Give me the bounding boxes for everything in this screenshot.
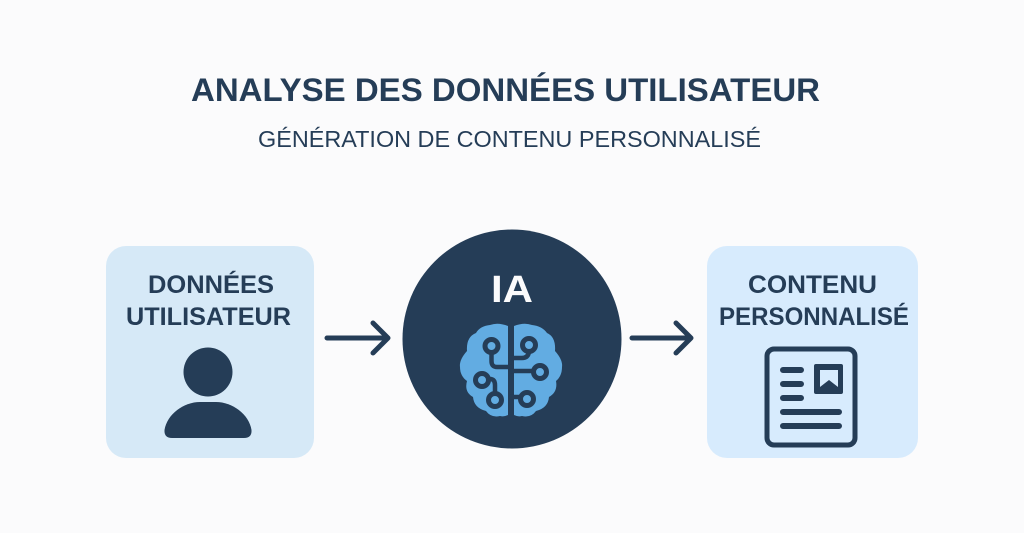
panel heading: user data: UTILISATEUR bbox=[126, 303, 291, 331]
panel heading: user data: DONNÉES bbox=[148, 270, 274, 299]
panel: AI bbox=[402, 230, 622, 448]
arrow: AI to content bbox=[632, 323, 691, 353]
panel: personalized content bbox=[707, 246, 918, 458]
AI label: IA bbox=[491, 269, 533, 311]
panel heading: user data bbox=[126, 270, 291, 331]
panel heading: personalized content: PERSONNALISÉ bbox=[719, 302, 909, 331]
title: ANALYSE DES DONNÉES UTILISATEUR bbox=[191, 72, 820, 108]
icon: user bbox=[164, 348, 252, 438]
panel heading: personalized content bbox=[719, 271, 909, 331]
panel heading: personalized content: CONTENU bbox=[748, 271, 877, 299]
icon: brain circuit bbox=[460, 324, 562, 416]
icon: document bbox=[767, 349, 855, 445]
arrow: data to AI bbox=[327, 323, 388, 353]
panel: user data bbox=[106, 246, 314, 458]
subtitle: GÉNÉRATION DE CONTENU PERSONNALISÉ bbox=[258, 126, 761, 152]
